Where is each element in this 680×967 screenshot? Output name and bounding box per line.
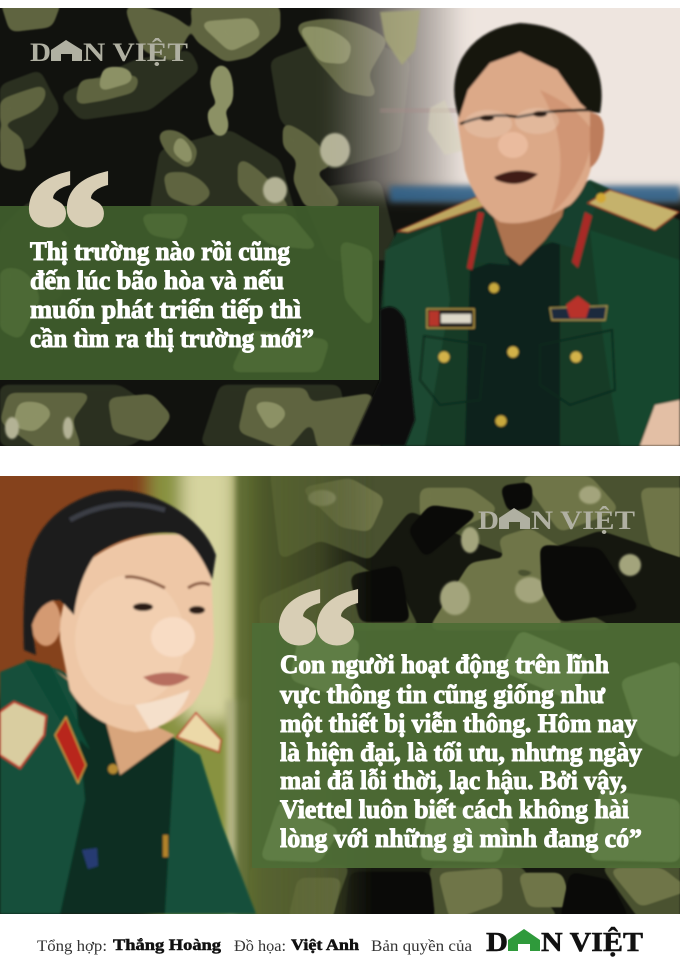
footer credits: Tổng hợp: bbox=[37, 938, 107, 955]
photo background fading into camouflage bbox=[325, 0, 680, 202]
quote box bbox=[252, 589, 680, 868]
logo: Dân Việt watermark: D bbox=[478, 506, 499, 535]
logo: Dân Việt: N VIỆT bbox=[541, 927, 643, 957]
quote text: muốn phát triển tiếp thì bbox=[30, 295, 301, 324]
camouflage background bbox=[250, 470, 680, 920]
logo: Dân Việt bbox=[486, 927, 643, 957]
quote text: Con người hoạt động trên lĩnh bbox=[280, 650, 610, 679]
epaulettes bbox=[398, 197, 484, 232]
nose and mouth bbox=[498, 132, 528, 158]
logo: Dân Việt watermark: N VIỆT bbox=[531, 506, 635, 535]
buttons and badge bbox=[108, 764, 118, 774]
footer credits: Đồ họa: bbox=[234, 938, 286, 955]
portrait: man in green uniform speaking bbox=[380, 23, 680, 446]
footer credits: Bản quyền của bbox=[371, 938, 472, 955]
quote box bbox=[0, 171, 379, 380]
panel: top quote bbox=[0, 0, 680, 450]
photo background fading into camouflage bbox=[0, 476, 362, 914]
quote text: vực thông tin cũng giống như bbox=[280, 680, 605, 709]
quote text bbox=[30, 237, 314, 353]
microphone shadow bbox=[350, 307, 415, 446]
eyes, brows, mouth bbox=[125, 577, 210, 588]
logo: Dân Việt watermark: N VIỆT bbox=[83, 38, 188, 67]
buttons, badges bbox=[489, 283, 499, 293]
icon: opening quotation mark: “ bbox=[274, 558, 360, 737]
face bbox=[458, 50, 596, 223]
quote text: Thị trường nào rồi cũng bbox=[30, 237, 290, 266]
footer credits: Thắng Hoàng bbox=[113, 937, 221, 954]
portrait: smiling man in green uniform bbox=[0, 490, 256, 914]
ear bbox=[31, 598, 61, 646]
quote text bbox=[280, 650, 642, 853]
quote text: cần tìm ra thị trường mới” bbox=[30, 324, 314, 353]
logo: Dân Việt watermark: D bbox=[30, 38, 51, 67]
glasses bbox=[460, 110, 592, 124]
footer credits bbox=[37, 927, 643, 957]
logo: Dân Việt: D bbox=[486, 927, 508, 957]
logo: Dân Việt watermark bbox=[30, 38, 188, 67]
quote text: Viettel luôn biết cách không hài bbox=[280, 795, 629, 824]
collar bbox=[483, 208, 510, 265]
quote text: là hiện đại, là tối ưu, nhưng ngày bbox=[280, 738, 642, 767]
footer credits: Việt Anh bbox=[291, 937, 359, 954]
neck bbox=[492, 208, 566, 267]
quote text: một thiết bị viễn thông. Hôm nay bbox=[280, 709, 637, 738]
quote text: đến lúc bão hòa và nếu bbox=[30, 266, 284, 295]
logo: Dân Việt watermark bbox=[478, 506, 635, 535]
camouflage background bbox=[0, 0, 410, 450]
face bbox=[60, 534, 214, 732]
hair bbox=[454, 23, 602, 118]
icon: opening quotation mark: “ bbox=[24, 140, 110, 319]
panel: bottom quote bbox=[0, 460, 680, 930]
quote text: mai đã lỗi thời, lạc hậu. Bởi vậy, bbox=[280, 766, 627, 795]
neck bbox=[55, 670, 175, 775]
hair bbox=[24, 490, 216, 655]
quote text: lòng với những gì mình đang có” bbox=[280, 824, 642, 853]
epaulettes and collar tab bbox=[0, 702, 46, 768]
